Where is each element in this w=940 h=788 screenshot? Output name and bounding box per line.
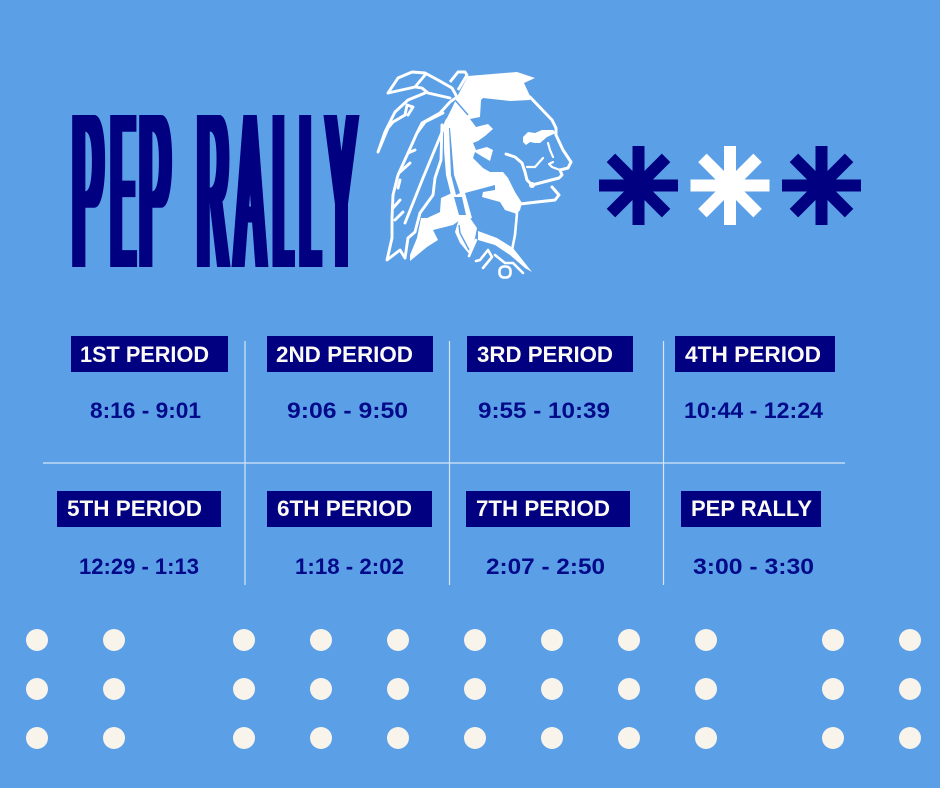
icon: navy asterisk right	[782, 146, 861, 225]
panel: 4th period	[675, 336, 835, 423]
panel: 3rd period: 3RD PERIOD	[477, 342, 613, 367]
face profile outline	[520, 97, 571, 204]
panel: pep rally: PEP RALLY	[691, 496, 812, 521]
panel: 1st period: 8:16 - 9:01	[90, 398, 201, 423]
icon: navy asterisk left	[599, 146, 678, 225]
ring on hand	[500, 266, 510, 278]
title: PEP RALLY: R	[198, 67, 228, 314]
lower hair mass	[410, 193, 468, 261]
icon: chief profile mascot	[378, 72, 571, 278]
panel: 7th period	[466, 491, 630, 579]
text: Y	[327, 67, 356, 314]
panel: pep rally: 3:00 - 3:30	[693, 554, 814, 579]
title: PEP RALLY: A	[236, 67, 264, 314]
brow	[523, 130, 556, 145]
panel: 7th period: 7TH PERIOD	[476, 496, 610, 521]
dot grid	[26, 629, 921, 749]
panel: 5th period	[57, 491, 221, 579]
panel: 6th period: 6TH PERIOD	[277, 496, 412, 521]
quill blue segments	[427, 128, 466, 218]
panel: 6th period	[267, 491, 432, 579]
title: PEP RALLY	[73, 67, 356, 314]
panel: 4th period: 10:44 - 12:24	[684, 398, 823, 423]
hair mass	[444, 72, 535, 220]
panel: 7th period: 2:07 - 2:50	[486, 554, 605, 579]
panel: 1st period	[71, 336, 228, 423]
panel: 3rd period: 9:55 - 10:39	[478, 398, 610, 423]
arm	[478, 231, 532, 272]
panel: 2nd period	[267, 336, 433, 423]
title: PEP RALLY: E	[112, 67, 134, 314]
panel: pep rally	[681, 491, 821, 579]
text: L	[301, 67, 319, 314]
headband hook	[450, 72, 467, 90]
fingers	[469, 240, 523, 273]
panel: 2nd period: 9:06 - 9:50	[287, 398, 408, 423]
title: PEP RALLY: L	[274, 67, 292, 314]
title: PEP RALLY: P	[140, 67, 170, 314]
panel: 1st period: 1ST PERIOD	[80, 342, 209, 367]
panel: 4th period: 4TH PERIOD	[685, 342, 821, 367]
panel: 6th period: 1:18 - 2:02	[295, 554, 404, 579]
icon: white asterisk center	[690, 146, 770, 225]
panel: 3rd period	[467, 336, 633, 423]
nose and mouth lines	[527, 143, 560, 170]
panel: 5th period: 12:29 - 1:13	[79, 554, 199, 579]
panel: 5th period: 5TH PERIOD	[67, 496, 202, 521]
quill tip	[455, 218, 477, 255]
title: PEP RALLY: P	[73, 67, 103, 314]
panel: 2nd period: 2ND PERIOD	[276, 342, 413, 367]
neck line	[512, 213, 517, 250]
feathers	[378, 72, 457, 260]
